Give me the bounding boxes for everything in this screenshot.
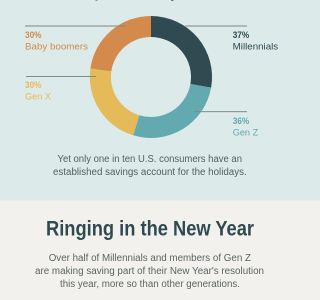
label: baby boomers: Baby boomers xyxy=(25,42,88,52)
savings caption xyxy=(53,154,247,178)
body text xyxy=(35,253,264,290)
savings caption: established savings account for the holidays. xyxy=(53,167,247,178)
label: millennials xyxy=(233,30,278,52)
leader line: gen z xyxy=(194,111,247,112)
label: gen x: 30% xyxy=(25,80,42,90)
donut chart xyxy=(90,16,212,138)
leader line: millennials xyxy=(185,25,247,27)
segment: baby boomers xyxy=(90,16,151,71)
label: millennials: 37% xyxy=(233,30,249,40)
leader line: gen x xyxy=(26,76,96,77)
body text: Over half of Millennials and members of Gen Z xyxy=(49,253,251,264)
label: millennials: Millennials xyxy=(233,42,278,52)
label: baby boomers: 30% xyxy=(25,30,42,40)
savings caption: Yet only one in ten U.S. consumers have an xyxy=(58,154,242,165)
label: gen x: Gen X xyxy=(25,92,52,102)
segment: gen x xyxy=(90,68,139,135)
label: gen x xyxy=(25,80,52,102)
body text: are making saving part of their New Year's resolution xyxy=(35,266,264,277)
segment: gen z xyxy=(133,84,211,138)
body text: this year, more so than other generations. xyxy=(60,279,240,290)
segment: millennials xyxy=(151,16,212,88)
leader line: baby boomers xyxy=(25,25,126,27)
heading: Ringing in the New Year xyxy=(46,218,254,241)
label: gen z xyxy=(233,116,258,139)
label: gen z: 36% xyxy=(233,116,249,126)
label: gen z: Gen Z xyxy=(233,128,258,139)
label: baby boomers xyxy=(25,30,88,52)
